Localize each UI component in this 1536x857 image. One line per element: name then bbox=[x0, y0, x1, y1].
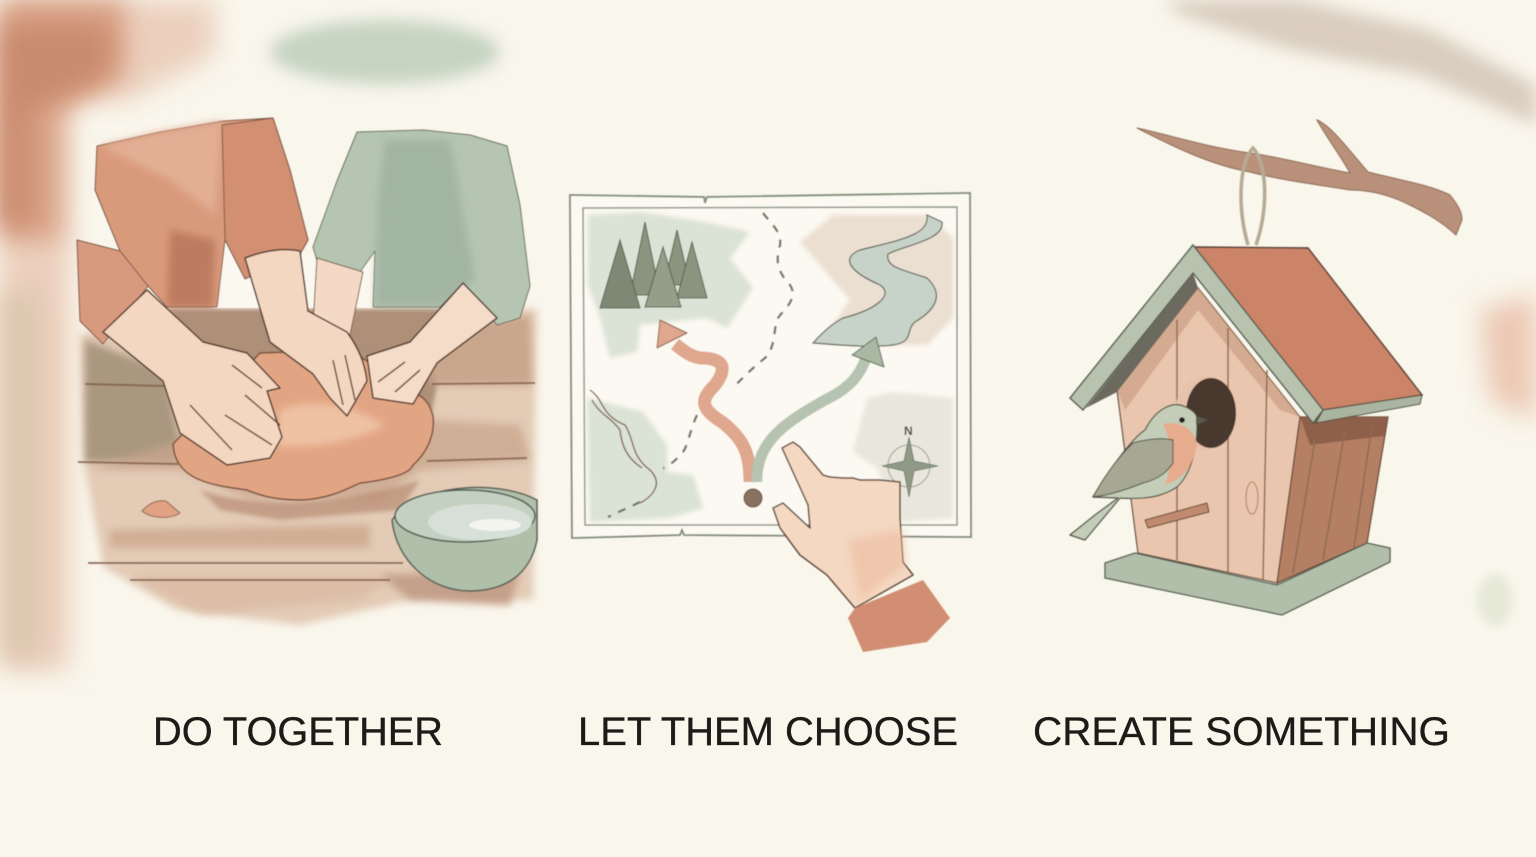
child hand and forearm bbox=[367, 283, 497, 404]
bowl bbox=[392, 487, 537, 591]
base bbox=[1105, 543, 1390, 615]
start dot bbox=[744, 489, 762, 507]
child sweater in sage bbox=[313, 130, 530, 325]
hanging loop bbox=[1241, 148, 1265, 245]
clay crumbs bbox=[142, 501, 180, 517]
compass: N bbox=[904, 424, 913, 438]
illustration: do together bbox=[77, 118, 537, 625]
child rear arm bbox=[313, 258, 363, 335]
illustration: create something bbox=[1070, 120, 1462, 615]
map wash patches bbox=[587, 212, 953, 522]
brook bbox=[590, 390, 656, 503]
label: create something: CREATE SOMETHING bbox=[1033, 710, 1450, 754]
roof underside strip bbox=[1316, 395, 1422, 423]
house body bbox=[1117, 288, 1388, 583]
river bbox=[813, 215, 942, 346]
adult forearm and hand left bbox=[103, 290, 282, 465]
trees bbox=[600, 222, 707, 308]
branch bbox=[1137, 120, 1462, 235]
bird bbox=[1070, 405, 1208, 540]
table bbox=[78, 309, 537, 625]
label: do together: DO TOGETHER bbox=[153, 710, 443, 754]
entrance hole bbox=[1175, 376, 1236, 450]
dough bbox=[173, 350, 433, 500]
adult torso and sleeve in terracotta bbox=[77, 118, 308, 344]
map sheet bbox=[570, 193, 971, 538]
roof bbox=[1193, 247, 1422, 410]
terracotta route arrow bbox=[657, 320, 750, 482]
fascia bbox=[1070, 245, 1323, 423]
adult forearm and hand right bbox=[245, 250, 367, 416]
pointing hand bbox=[773, 442, 950, 652]
dashed path bbox=[608, 213, 793, 517]
perch bbox=[1145, 503, 1209, 528]
compass bbox=[882, 424, 938, 497]
blurred watercolor background edges bbox=[0, 0, 1536, 670]
sage route arrow bbox=[757, 337, 884, 482]
illustration: let them choose bbox=[570, 193, 971, 652]
gap between figures bbox=[213, 205, 375, 308]
label: let them choose: LET THEM CHOOSE bbox=[578, 710, 958, 754]
